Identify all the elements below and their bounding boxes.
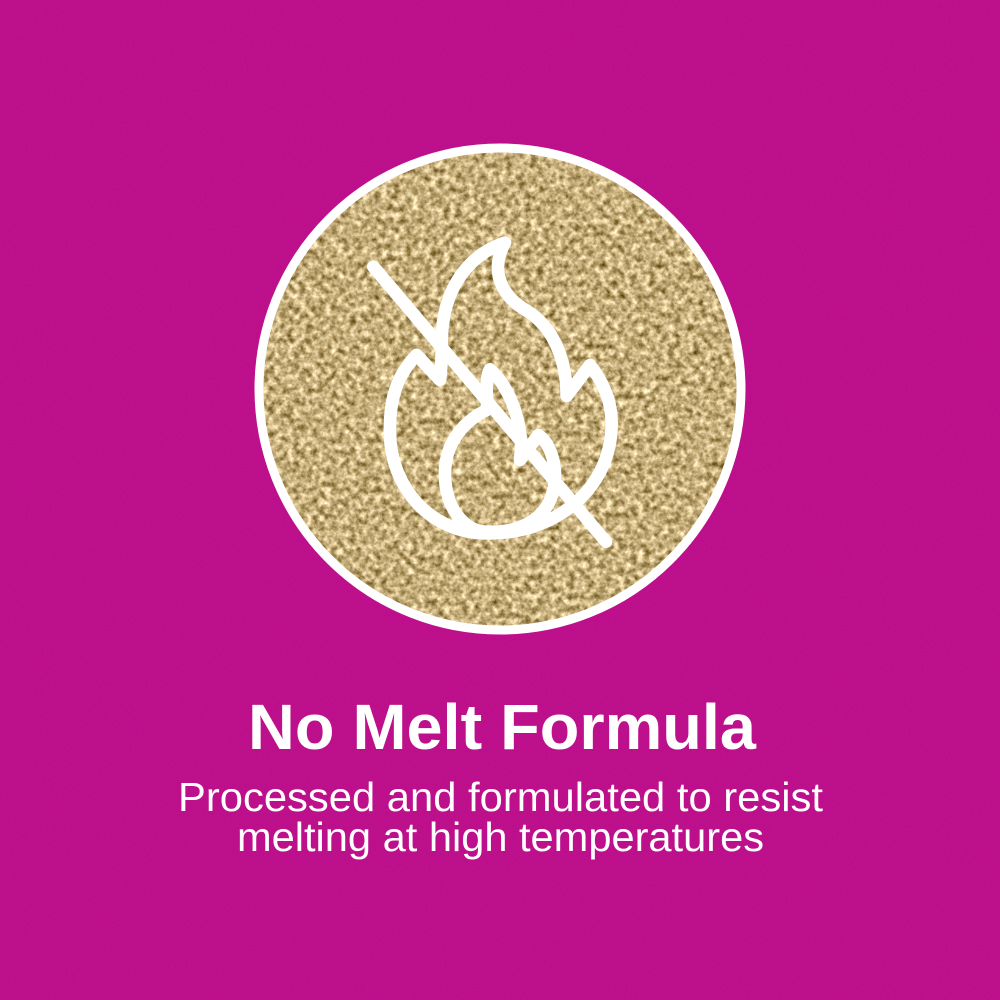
description text: Processed and formulated to resist <box>178 774 824 820</box>
icon: crossed-out flame <box>373 243 612 542</box>
description text: melting at high temperatures <box>237 814 764 860</box>
description text <box>178 774 824 860</box>
title: No Melt Formula <box>248 691 756 763</box>
panel: textured grain circle <box>255 144 745 634</box>
